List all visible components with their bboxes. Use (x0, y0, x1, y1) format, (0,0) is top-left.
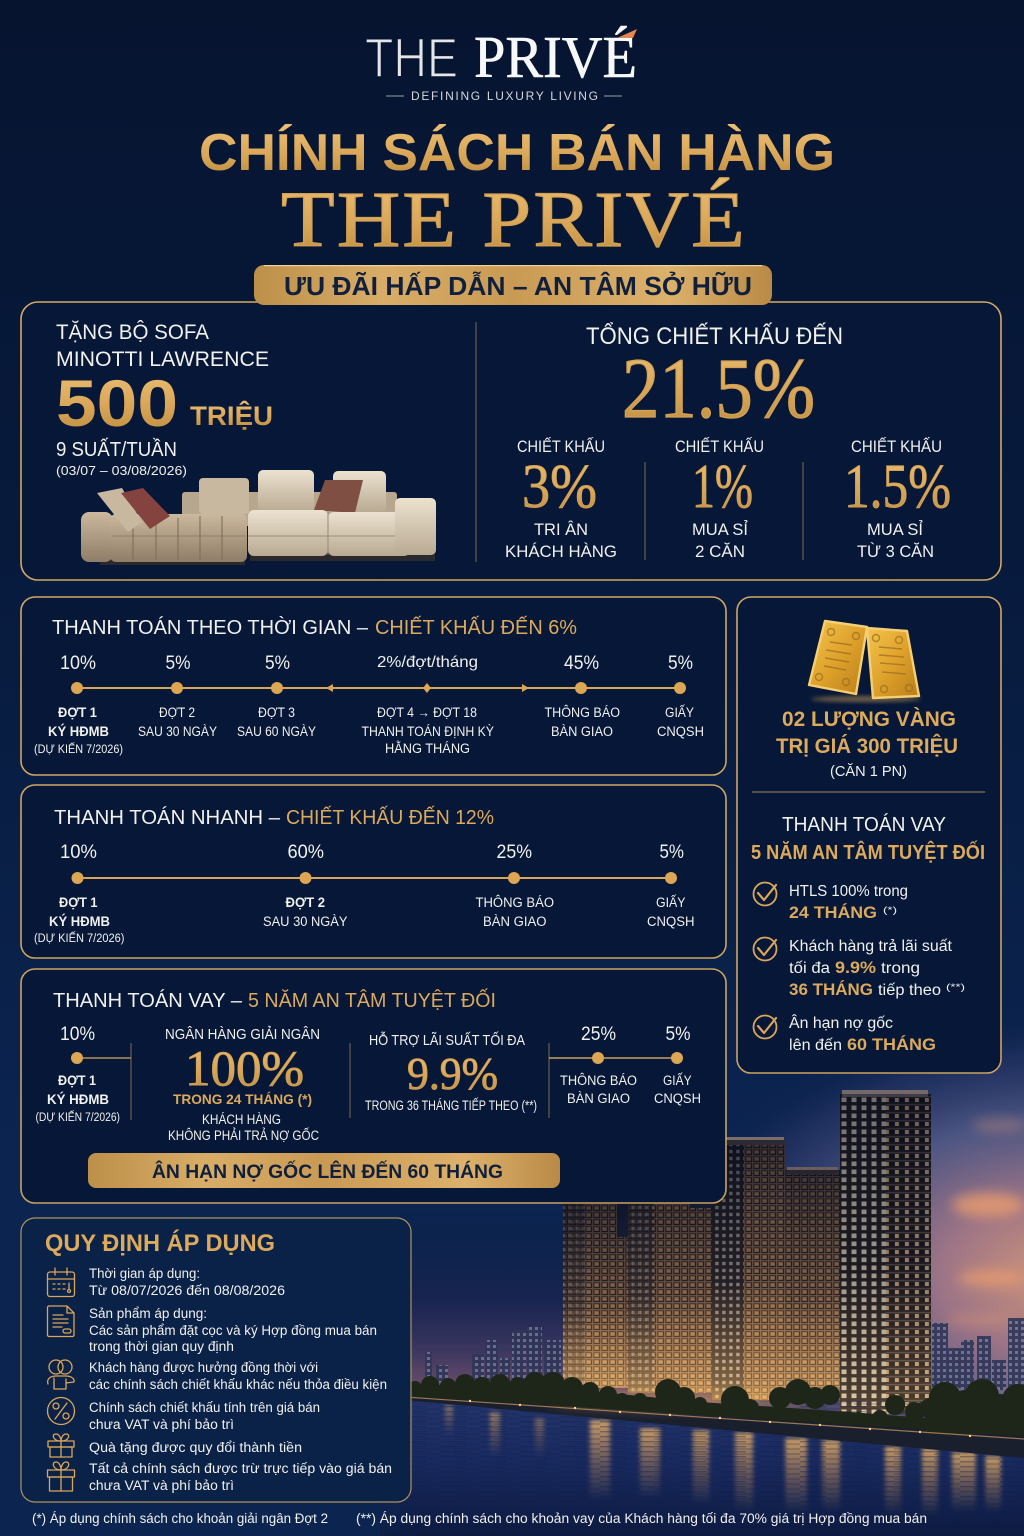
percent labels (60, 653, 693, 674)
discount 3% (505, 437, 617, 561)
discount 3%: TRI ÂN (534, 520, 588, 539)
embankment and trees (405, 1372, 1024, 1458)
stage labels (34, 895, 694, 945)
panel: gold gift and loan benefits (737, 597, 1001, 1073)
grace period banner: ÂN HẠN NỢ GỐC LÊN ĐẾN 60 THÁNG (152, 1161, 503, 1183)
logo (365, 24, 637, 103)
sofa gift text (56, 321, 273, 478)
tower D (785, 1167, 840, 1400)
percent labels: 10% (60, 842, 97, 863)
banner: ƯU ĐÃI HẤP DẪN – AN TÂM SỞ HỮU (284, 270, 752, 301)
first stage: (DỰ KIẾN 7/2026) (36, 1111, 120, 1124)
discount 1%: 2 CĂN (695, 542, 745, 561)
first stage: ĐỢT 1 (58, 1073, 96, 1088)
discount 1.5%: 1.5% (844, 453, 951, 521)
photo: riverside towers at dusk (0, 1010, 1024, 1536)
terms: price basis (89, 1400, 320, 1432)
footnotes: (*) Áp dụng chính sách cho khoản giải ngân Đợt 2 (32, 1511, 328, 1526)
icon: gift (48, 1434, 74, 1457)
divider (475, 322, 477, 562)
heading (54, 806, 494, 829)
stage labels: SAU 30 NGÀY (138, 724, 217, 739)
terms: price basis: Chính sách chiết khấu tính trên giá bán (89, 1400, 320, 1415)
footnotes (32, 1511, 927, 1526)
interest support: 9.9% (407, 1048, 498, 1099)
heading: CHIẾT KHẤU ĐẾN 6% (375, 616, 577, 639)
benefit: grace period: 60 THÁNG (847, 1035, 936, 1054)
terms: products: Các sản phẩm đặt cọc và ký Hợp đồng mua bán (89, 1323, 377, 1338)
sky (400, 1010, 1024, 1440)
tower C (712, 1137, 785, 1400)
bank disbursement (165, 1026, 320, 1143)
benefit: capped interest: (**) (946, 982, 965, 993)
terms: price basis: chưa VAT và phí bảo trì (89, 1417, 234, 1432)
terms: period: Từ 08/07/2026 đến 08/08/2026 (89, 1283, 285, 1298)
bank disbursement: TRONG 24 THÁNG (*) (173, 1091, 312, 1107)
panel: loan payment (21, 969, 726, 1203)
stage labels: HẰNG THÁNG (385, 741, 470, 756)
terms heading: QUY ĐỊNH ÁP DỤNG (45, 1229, 275, 1257)
icon: sofa (81, 470, 436, 565)
discount 1%: CHIẾT KHẤU (675, 437, 764, 456)
terms: products (89, 1306, 377, 1354)
terms: direct deduction (89, 1461, 392, 1493)
benefit: capped interest: trong (881, 960, 920, 977)
stage labels: GIẤY (656, 895, 686, 910)
heading (52, 616, 577, 639)
loan benefits heading (751, 813, 985, 864)
benefit: interest free: HTLS 100% trong (789, 883, 908, 900)
percent labels: 5% (660, 842, 684, 863)
terms: period: Thời gian áp dụng: (89, 1266, 200, 1281)
benefit: interest free (754, 882, 908, 922)
first stage (36, 1024, 131, 1124)
heading: THANH TOÁN THEO THỜI GIAN – (52, 616, 369, 639)
sofa gift text: 9 SUẤT/TUẦN (56, 438, 177, 461)
terms: combined: các chính sách chiết khấu khác nếu thỏa điều kiện (89, 1377, 387, 1392)
sofa gift text: 500 (56, 366, 178, 440)
final stages: GIẤY (663, 1073, 692, 1088)
heading: THANH TOÁN VAY – (53, 989, 243, 1012)
sofa gift text: MINOTTI LAWRENCE (56, 348, 269, 371)
stage labels: SAU 60 NGÀY (237, 724, 316, 739)
river reflections (410, 1400, 1024, 1536)
bank disbursement: KHÁCH HÀNG (202, 1112, 281, 1127)
discount 1%: MUA SỈ (692, 520, 748, 539)
benefit: grace period: Ân hạn nợ gốc (789, 1015, 893, 1032)
terms: products: trong thời gian quy định (89, 1339, 234, 1354)
stage labels: ĐỢT 1 (59, 895, 98, 910)
icon: gift box (48, 1462, 74, 1491)
discount 1%: 1% (692, 453, 753, 521)
sofa gift text: TRIỆU (190, 400, 273, 431)
terms: gift conversion: Quà tặng được quy đổi thành tiền (89, 1440, 302, 1455)
loan benefits heading: 5 NĂM AN TÂM TUYỆT ĐỐI (751, 840, 985, 864)
final stages: 5% (666, 1024, 691, 1045)
main heading (199, 124, 835, 264)
stage labels: THÔNG BÁO (544, 705, 620, 720)
percent labels: 5% (166, 653, 191, 674)
percent labels: 45% (564, 653, 599, 674)
terms: combined (89, 1360, 387, 1392)
first stage: KÝ HĐMB (47, 1092, 109, 1107)
grace period banner (88, 1153, 560, 1188)
benefit: capped interest: tối đa (789, 960, 830, 977)
final stages: CNQSH (654, 1091, 701, 1106)
gold gift text: (CĂN 1 PN) (830, 763, 907, 780)
stage labels (34, 705, 704, 756)
main heading: CHÍNH SÁCH BÁN HÀNG (199, 124, 835, 182)
logo accent (617, 29, 637, 38)
discount 1% (675, 437, 764, 561)
icon: gold bars (809, 621, 921, 702)
stage labels: KÝ HĐMB (49, 914, 110, 929)
tower A (563, 1194, 630, 1388)
terms: combined: Khách hàng được hưởng đồng thời với (89, 1360, 318, 1375)
heading: CHIẾT KHẤU ĐẾN 12% (286, 806, 494, 829)
interest support (365, 1031, 537, 1113)
water (380, 1394, 1024, 1536)
panel: pay over time (21, 597, 726, 775)
banner (254, 265, 772, 305)
discount 3%: 3% (522, 453, 597, 521)
stage labels: ĐỢT 1 (58, 705, 97, 720)
stage labels: ĐỢT 2 (159, 705, 195, 720)
percent labels: 60% (288, 842, 324, 863)
first stage: 10% (60, 1024, 95, 1045)
terms: products: Sản phẩm áp dụng: (89, 1306, 207, 1321)
discount 3%: KHÁCH HÀNG (505, 542, 617, 561)
benefit: capped interest: tiếp theo (878, 982, 941, 999)
percent labels: 5% (668, 653, 693, 674)
benefit: capped interest (754, 938, 965, 999)
stage labels: THANH TOÁN ĐỊNH KỲ (362, 724, 494, 739)
icon: document (48, 1306, 74, 1336)
icon: customers (48, 1360, 74, 1389)
panel: gift and total discount (21, 265, 1001, 580)
percent labels: 25% (496, 842, 532, 863)
final stages: THÔNG BÁO (560, 1073, 637, 1088)
stage labels: BÀN GIAO (483, 914, 546, 929)
heading: THANH TOÁN NHANH – (54, 806, 281, 829)
sofa gift text: (03/07 – 03/08/2026) (56, 463, 187, 478)
discount 1.5%: MUA SỈ (867, 520, 923, 539)
benefit: capped interest: Khách hàng trả lãi suất (789, 938, 953, 955)
terms: direct deduction: chưa VAT và phí bảo trì (89, 1478, 234, 1493)
percent labels: 2%/đợt/tháng (377, 654, 478, 671)
discount 3%: CHIẾT KHẤU (517, 437, 605, 456)
percent labels: 10% (60, 653, 96, 674)
benefit: interest free: 24 THÁNG (789, 903, 877, 922)
discount 1.5% (844, 437, 951, 561)
icon: percent circle (48, 1398, 74, 1424)
benefit: interest free: (*) (883, 905, 897, 916)
sofa gift text: TẶNG BỘ SOFA (56, 321, 209, 344)
tower B (628, 1172, 714, 1393)
stage labels: ĐỢT 4 → ĐỢT 18 (377, 705, 477, 720)
gold gift text: 02 LƯỢNG VÀNG (782, 708, 956, 731)
interest support: TRONG 36 THÁNG TIẾP THEO (**) (365, 1098, 537, 1113)
stage labels: BÀN GIAO (551, 724, 613, 739)
heading (53, 988, 496, 1012)
logo: PRIVÉ (474, 24, 637, 90)
stage labels: ĐỢT 2 (286, 895, 325, 910)
percent labels: 5% (265, 653, 290, 674)
benefit: capped interest: 36 THÁNG (789, 980, 873, 999)
percent labels (60, 842, 684, 863)
panel: fast payment (21, 785, 726, 958)
total discount: TỔNG CHIẾT KHẤU ĐẾN (586, 322, 843, 350)
final stages (549, 1024, 701, 1118)
stage labels: SAU 30 NGÀY (263, 914, 348, 929)
gold gift text: TRỊ GIÁ 300 TRIỆU (776, 734, 958, 758)
bank disbursement: KHÔNG PHẢI TRẢ NỢ GỐC (168, 1128, 319, 1143)
terms: period (89, 1266, 285, 1298)
total discount: 21.5% (622, 340, 815, 436)
gold gift text (776, 708, 958, 780)
panel: terms (21, 1218, 411, 1502)
stage labels: THÔNG BÁO (476, 895, 554, 910)
stage labels: (DỰ KIẾN 7/2026) (34, 743, 123, 756)
interest support: HỖ TRỢ LÃI SUẤT TỐI ĐA (369, 1031, 525, 1049)
stage labels: CNQSH (647, 914, 694, 929)
final stages: 25% (581, 1024, 616, 1045)
final stages: BÀN GIAO (567, 1091, 630, 1106)
logo wordmark: THE (365, 26, 458, 89)
benefit: grace period: lên đến (789, 1037, 842, 1054)
stage labels: ĐỢT 3 (258, 705, 295, 720)
distant skyline (425, 1318, 1024, 1390)
benefit: capped interest: 9.9% (835, 959, 876, 977)
discount 1.5%: CHIẾT KHẤU (851, 437, 942, 456)
stage labels: KÝ HĐMB (48, 724, 109, 739)
stage labels: (DỰ KIẾN 7/2026) (34, 932, 125, 945)
benefit: grace period (754, 1015, 936, 1054)
footnotes: (**) Áp dụng chính sách cho khoản vay của Khách hàng tối đa 70% giá trị Hợp đồng mua bán (356, 1511, 927, 1526)
timeline (71, 682, 686, 694)
timeline (72, 872, 677, 884)
discount 1.5%: TỪ 3 CĂN (857, 542, 934, 561)
bank disbursement: 100% (185, 1040, 304, 1096)
main heading: THE PRIVÉ (281, 177, 747, 264)
terms: direct deduction: Tất cả chính sách được trừ trực tiếp vào giá bán (89, 1461, 392, 1476)
bank disbursement: NGÂN HÀNG GIẢI NGÂN (165, 1026, 320, 1043)
icon: calendar (48, 1268, 74, 1296)
stage labels: CNQSH (657, 724, 704, 739)
stage labels: GIẤY (665, 705, 694, 720)
heading: 5 NĂM AN TÂM TUYỆT ĐỐI (248, 988, 496, 1012)
tower E (840, 1090, 931, 1414)
loan benefits heading: THANH TOÁN VAY (782, 813, 946, 836)
tagline: DEFINING LUXURY LIVING (411, 89, 598, 103)
